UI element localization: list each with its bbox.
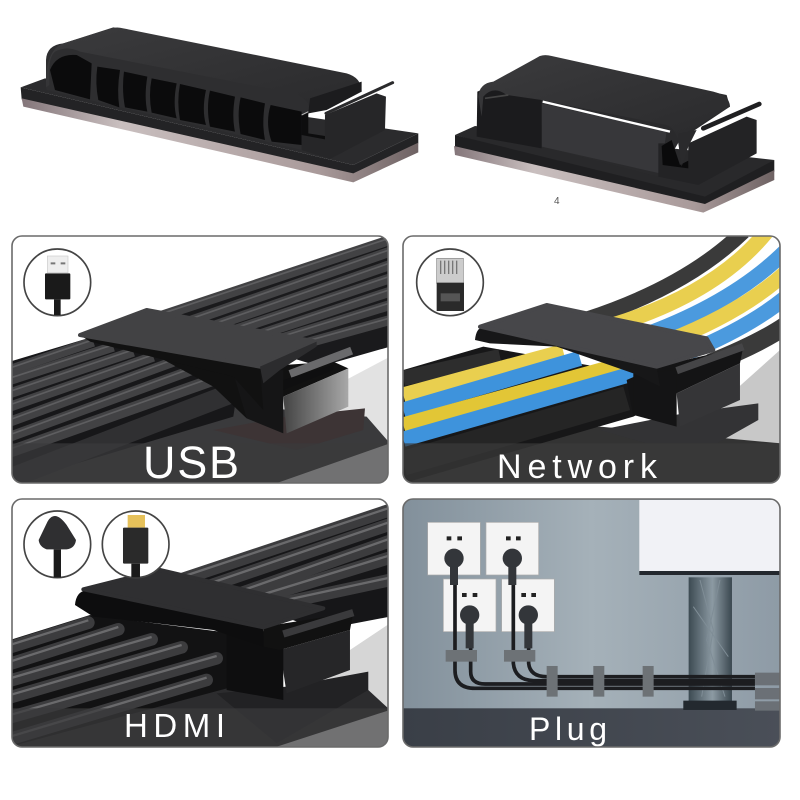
plugs xyxy=(444,549,538,648)
wall sockets xyxy=(428,522,554,632)
label: USB: USB xyxy=(143,437,239,488)
label: Plug: Plug xyxy=(529,711,607,747)
routed cables xyxy=(455,577,755,688)
cable bundle boxes xyxy=(755,673,780,711)
product photo: 8-slot cable clip xyxy=(21,27,418,182)
icon: power plug xyxy=(24,511,91,578)
panel: HDMI xyxy=(7,499,390,750)
product photo: single-slot cable clip xyxy=(454,55,774,213)
stray mark: 4: 4 xyxy=(554,196,560,207)
band: HDMI label xyxy=(10,708,390,748)
band: USB label xyxy=(10,443,390,485)
icon: USB connector xyxy=(24,249,91,316)
panel: Network xyxy=(403,232,787,487)
panel: USB xyxy=(10,236,390,488)
table leg xyxy=(683,577,737,710)
icon: RJ45 network connector xyxy=(417,249,483,316)
panel: Plug xyxy=(403,499,783,748)
label: Network: Network xyxy=(497,448,658,486)
icon: HDMI connector xyxy=(102,511,169,578)
band: Network label xyxy=(403,443,783,485)
table top xyxy=(639,500,781,575)
label: HDMI: HDMI xyxy=(124,707,225,744)
cable clips xyxy=(446,650,654,697)
